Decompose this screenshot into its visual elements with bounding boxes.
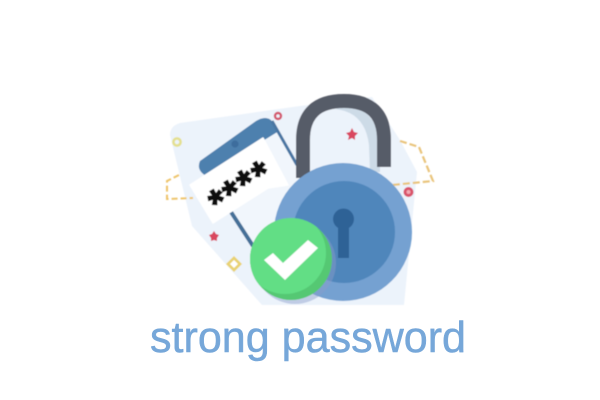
icon: dashed path right <box>392 141 433 185</box>
icon: yellow ring <box>173 138 181 146</box>
icon: yellow diamond <box>228 258 240 270</box>
icon: green check badge <box>250 218 336 304</box>
badge shadow <box>254 222 336 304</box>
password asterisks: * <box>201 180 237 226</box>
password asterisks: * <box>229 161 265 207</box>
phone screen <box>203 125 300 245</box>
shackle foot <box>377 160 391 167</box>
phone lower edge <box>231 212 253 246</box>
infographic: strong password <box>151 93 464 362</box>
badge highlight <box>250 218 326 294</box>
password asterisks <box>201 152 280 226</box>
keyhole <box>333 208 354 258</box>
icon: red star top <box>346 128 358 140</box>
lock body inner <box>293 181 395 283</box>
icon: phone <box>190 118 300 246</box>
badge circle <box>250 218 332 300</box>
password speech card <box>190 138 288 226</box>
lock body outer <box>274 163 412 301</box>
check mark <box>264 240 318 280</box>
icon: dashed path left <box>167 175 193 199</box>
icon: red ring top <box>275 113 281 119</box>
password asterisks: * <box>215 171 251 217</box>
phone camera <box>231 140 239 148</box>
background blob <box>170 97 417 305</box>
password asterisks: * <box>244 152 280 198</box>
icon: padlock <box>274 101 412 301</box>
phone top bar <box>199 118 279 176</box>
phone right edge <box>272 121 297 165</box>
icon: red target <box>404 187 414 197</box>
icon: red star bottom <box>209 231 219 241</box>
title: strong password <box>150 313 466 362</box>
shackle shadow <box>335 105 380 172</box>
illustration: padlock and phone <box>167 97 433 305</box>
shackle <box>303 101 384 178</box>
